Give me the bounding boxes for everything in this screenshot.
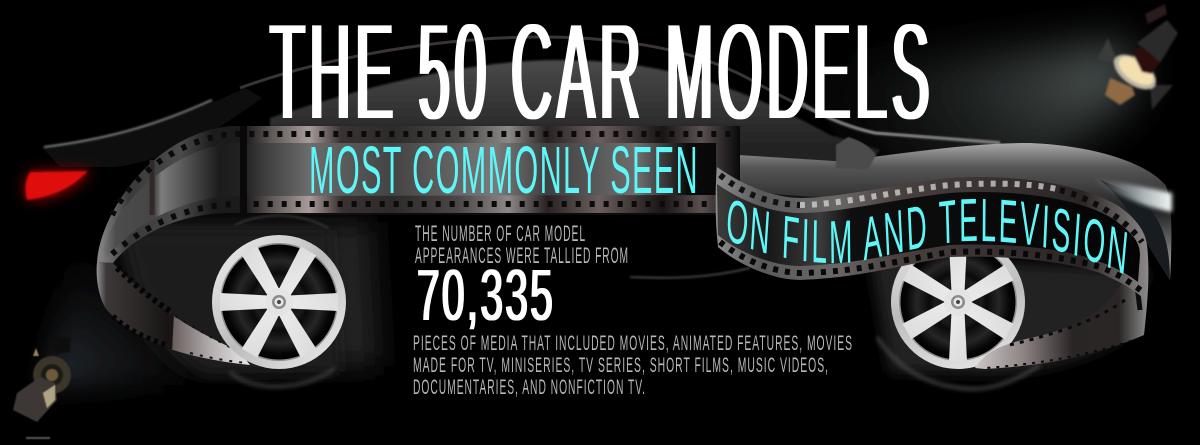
intro text: THE NUMBER OF CAR MODEL: [415, 221, 586, 246]
side mirror: [836, 137, 876, 170]
car nose highlight: [1090, 178, 1172, 212]
infographic header: APPEARANCES WERE TALLIED FROM: [415, 243, 629, 268]
infographic header: MOST COMMONLY SEEN: [309, 133, 699, 208]
ribbon sprockets bottom: [720, 242, 1143, 292]
description text: DOCUMENTARIES, AND NONFICTION TV.: [413, 376, 646, 399]
car cabin glass: [270, 60, 880, 215]
subtitle: on film and television: ON FILM AND TELEVISION: [728, 198, 1128, 274]
car hood: [738, 143, 1171, 280]
sprocket holes lower: [985, 338, 1140, 368]
sprocket holes lower thin: [190, 353, 246, 363]
sprocket holes upper thin: [175, 316, 236, 350]
car roof line: [240, 37, 1000, 142]
sill highlight: [630, 268, 750, 278]
sprocket holes upper: [117, 268, 170, 311]
film strip: top and curl: [97, 126, 740, 263]
frame divider: [170, 314, 172, 349]
film strip: wavy front ribbon: [716, 167, 1147, 300]
right spotlight beam: [780, 45, 1130, 300]
red tail light: [25, 170, 92, 200]
big number: 70,335: [417, 256, 555, 336]
car rear spoiler: [42, 88, 262, 167]
film strip: right tail: [975, 245, 1148, 369]
intro text: [415, 221, 629, 268]
rear lower body core: [125, 230, 340, 374]
front wheel arch glow: [877, 337, 1040, 389]
film reel: front wheel: [866, 210, 1050, 394]
ribbon frame area: [717, 184, 1140, 282]
sprocket holes upper: [1005, 300, 1125, 346]
front lower body shade: [870, 255, 1150, 374]
strip band: [97, 126, 740, 263]
ribbon sprockets top dark: [720, 175, 800, 205]
rear wheel arch glow: [230, 368, 335, 387]
frame divider: [240, 126, 247, 213]
left spotlight beam: [45, 240, 220, 385]
sprocket holes top: [112, 134, 738, 215]
frame area: [103, 143, 716, 258]
side frame: [1132, 245, 1140, 310]
film reel: rear wheel: [212, 235, 346, 369]
curved frame divider: [150, 160, 154, 215]
icon: left film camera: [13, 337, 71, 439]
description text: [413, 332, 853, 399]
rear wheel arch top: [235, 216, 328, 228]
sprocket holes bottom: [112, 204, 738, 254]
sprocket holes lower: [113, 316, 167, 345]
roof to hood highlight: [800, 102, 1000, 143]
rear lower body shade: [118, 222, 380, 368]
frame streak: [155, 164, 716, 166]
ribbon sprockets top light: [800, 184, 1060, 205]
front fender shade: [1100, 180, 1170, 280]
ribbon sprockets top right: [1060, 190, 1142, 242]
car silhouette: [42, 37, 1172, 389]
spoiler highlight: [44, 100, 212, 147]
film strip: lower left tail: [97, 262, 250, 365]
icon: right stage spotlight: [1097, 4, 1178, 110]
